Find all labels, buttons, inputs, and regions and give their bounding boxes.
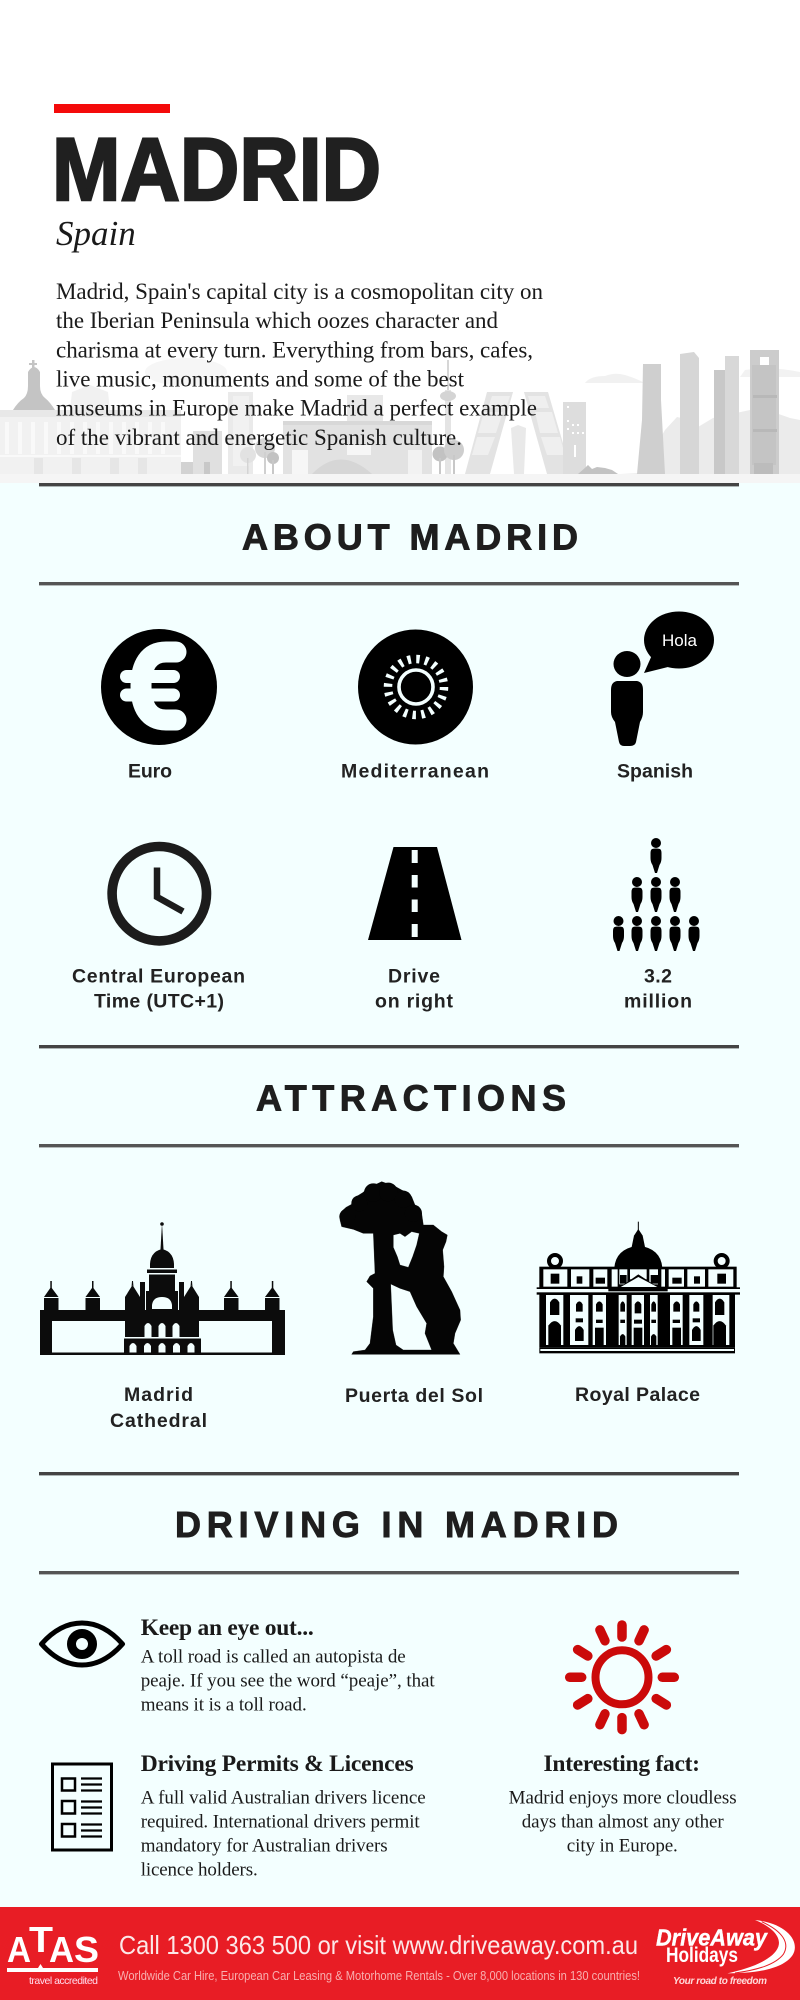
icon: people pyramid <box>613 838 700 951</box>
logo: ATAS: A <box>7 1929 31 1970</box>
turrets <box>44 1281 280 1310</box>
logo: DriveAway Holidays: DriveAway <box>656 1925 768 1951</box>
royal palace silhouette <box>0 360 181 474</box>
call to action: Call 1300 363 500 or visit www.driveaway.com.au <box>119 1930 638 1960</box>
tip: keep an eye out: peaje. If you see the word “peaje”, that <box>141 1671 435 1692</box>
item: population: million <box>624 990 692 1012</box>
TV tower and trees <box>432 360 464 474</box>
icon: document checklist <box>52 1764 112 1850</box>
item: time zone <box>72 846 245 1012</box>
item: euro: Euro <box>128 761 172 783</box>
item: language: Spanish <box>617 761 693 783</box>
subtitle: Spain <box>56 214 136 253</box>
palace bays <box>546 1295 729 1345</box>
item: population <box>613 838 700 1012</box>
icon: cathedral <box>40 1222 285 1355</box>
tip: keep an eye out <box>42 1615 435 1716</box>
intro paragraph: the Iberian Peninsula which oozes character and <box>56 308 498 333</box>
icon: eye <box>42 1623 122 1665</box>
icon: bear and strawberry tree <box>339 1182 461 1354</box>
intro paragraph <box>56 279 544 450</box>
item: driving side: Drive <box>388 966 440 988</box>
icon: person with speech bubble: Hola <box>662 631 698 650</box>
interesting fact: Madrid enjoys more cloudless <box>509 1787 737 1808</box>
tip: driving permits and licences <box>52 1751 426 1881</box>
item: language <box>611 612 714 783</box>
tip: keep an eye out: A toll road is called an autopista de <box>141 1647 406 1668</box>
intro paragraph: charisma at every turn. Everything from bars, cafes, <box>56 337 533 362</box>
attraction: Madrid Cathedral: Madrid <box>124 1384 193 1406</box>
tip: driving permits and licences: A full valid Australian drivers licence <box>141 1787 426 1808</box>
logo: DriveAway Holidays: Holidays <box>666 1944 738 1967</box>
icon: red sun <box>570 1625 674 1730</box>
logo: ATAS: T <box>29 1919 53 1960</box>
logo: DriveAway Holidays: Your road to freedom <box>673 1976 767 1987</box>
attraction: Puerta del Sol: Puerta del Sol <box>345 1385 483 1407</box>
tip: driving permits and licences: licence holders. <box>141 1860 258 1881</box>
logo: ATAS: A <box>49 1929 74 1970</box>
tip: driving permits and licences: required. International drivers permit <box>141 1811 420 1832</box>
heading: driving in madrid: DRIVING IN MADRID <box>175 1504 618 1545</box>
item: driving side: on right <box>375 990 454 1012</box>
item: time zone: Central European <box>72 966 245 988</box>
tip: keep an eye out: Keep an eye out... <box>141 1615 314 1641</box>
attraction: Madrid Cathedral <box>40 1222 285 1432</box>
intro paragraph: museums in Europe make Madrid a perfect example <box>56 396 537 421</box>
palace windows <box>548 1299 726 1345</box>
logo: DriveAway Holidays <box>656 1920 795 1987</box>
intro paragraph: Madrid, Spain's capital city is a cosmopolitan city on <box>56 279 544 304</box>
skyline illustration <box>0 350 800 483</box>
item: driving side <box>368 847 462 1012</box>
mid buildings and trees <box>181 392 279 474</box>
item: climate: Mediterranean <box>341 761 489 783</box>
Cuatro Torres skyscrapers <box>637 350 779 474</box>
interesting fact <box>509 1625 737 1857</box>
icon: euro coin <box>101 629 217 745</box>
logo: ATAS <box>7 1919 99 1987</box>
red accent bar <box>54 104 170 113</box>
interesting fact: days than almost any other <box>522 1811 724 1832</box>
icon: clock <box>112 846 206 941</box>
attraction: Madrid Cathedral: Cathedral <box>110 1410 207 1432</box>
attraction: Puerta del Sol <box>339 1182 483 1407</box>
intro paragraph: live music, monuments and some of the best <box>56 366 465 392</box>
heading: attractions: ATTRACTIONS <box>256 1078 566 1118</box>
icon: palace <box>537 1222 740 1353</box>
interesting fact: city in Europe. <box>567 1836 678 1857</box>
footer band <box>0 1907 800 2000</box>
KIO towers <box>465 392 618 474</box>
item: time zone: Time (UTC+1) <box>94 990 224 1012</box>
logo: ATAS: travel accredited <box>29 1975 98 1987</box>
attraction: Royal Palace: Royal Palace <box>575 1384 700 1406</box>
icon: person with speech bubble <box>611 612 714 746</box>
icon: road <box>368 847 462 940</box>
tip: keep an eye out: means it is a toll road. <box>141 1695 307 1716</box>
tip: driving permits and licences: mandatory for Australian drivers <box>141 1836 388 1857</box>
interesting fact: Interesting fact: <box>544 1751 700 1777</box>
attraction: Royal Palace <box>537 1222 740 1406</box>
item: euro <box>101 629 217 783</box>
Alcala gate <box>283 395 432 474</box>
icon: sun in circle <box>358 630 473 744</box>
title: MADRID <box>52 119 381 219</box>
heading: about madrid: ABOUT MADRID <box>242 516 578 557</box>
logo: ATAS: S <box>74 1929 99 1970</box>
tagline: Worldwide Car Hire, European Car Leasing & Motorhome Rentals - Over 8,000 locations in 130 countries! <box>118 1968 640 1983</box>
item: climate <box>341 630 489 783</box>
tip: driving permits and licences: Driving Permits & Licences <box>141 1751 414 1777</box>
intro paragraph: of the vibrant and energetic Spanish culture. <box>56 425 462 450</box>
item: population: 3.2 <box>644 966 672 988</box>
